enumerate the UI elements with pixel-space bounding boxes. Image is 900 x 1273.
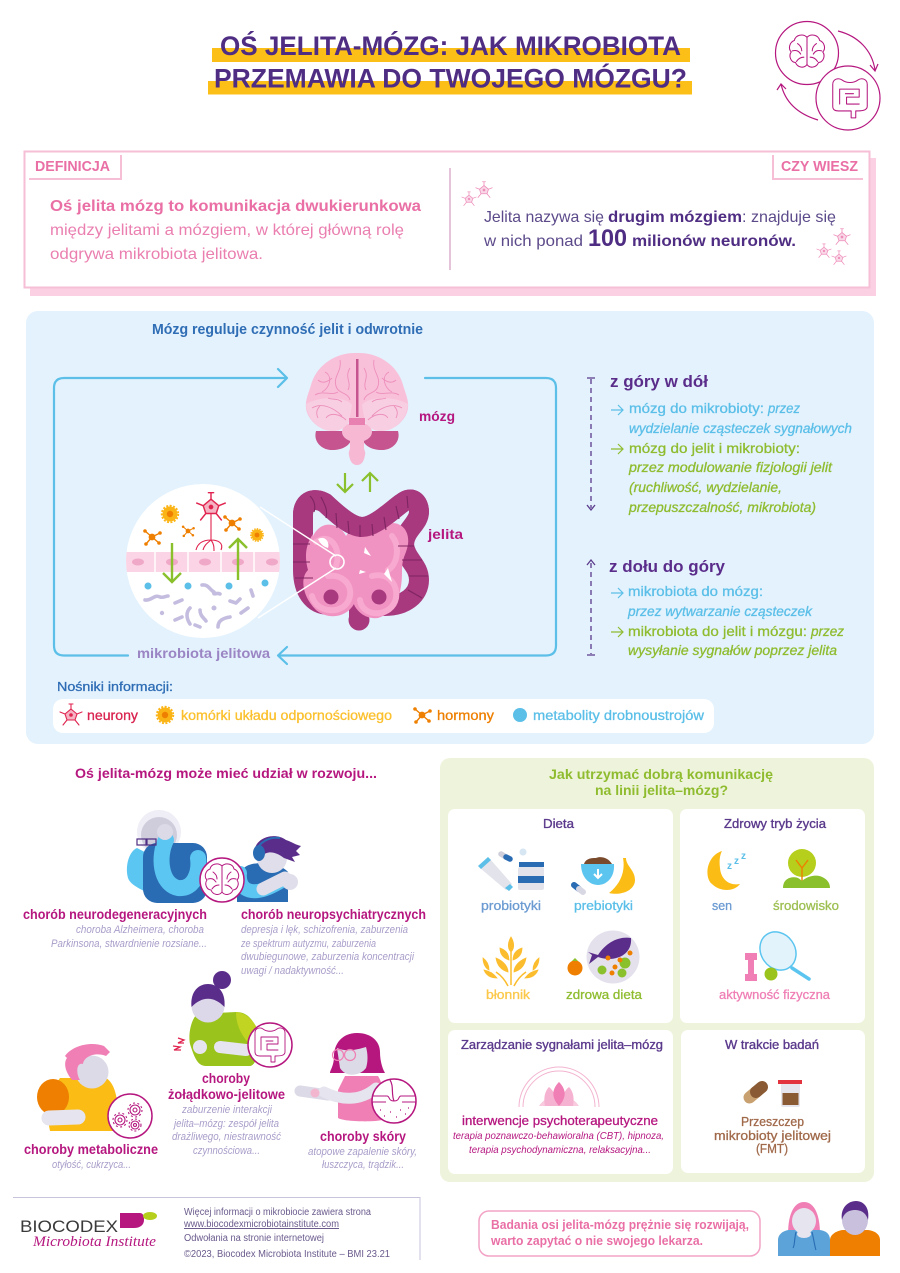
illustration: brain	[306, 353, 408, 465]
label: błonnik	[486, 987, 531, 1002]
top down explanation: (ruchliwość, wydzielanie,	[629, 479, 782, 495]
footer text: www.biocodexmicrobiotainstitute.com	[183, 1219, 339, 1230]
definition tab: DEFINICJA	[35, 159, 111, 175]
card: lifestyle: Zdrowy tryb życia	[724, 817, 826, 831]
did you know tab: CZY WIESZ	[781, 159, 858, 175]
text: skin: łuszczyca, trądzik...	[322, 1159, 404, 1171]
legend heading: Nośniki informacji:	[57, 679, 173, 694]
legend	[53, 699, 714, 733]
icon: gut badge	[248, 1023, 292, 1067]
bottom up explanation: mikrobiota do jelit i mózgu:	[628, 623, 807, 639]
definition tab	[29, 155, 121, 179]
text: neuropsychiatric: depresja i lęk, schizofrenia, zaburzenia	[241, 924, 408, 936]
icon: neuron sparkles	[462, 182, 850, 264]
bottom up explanation: z dołu do góry	[609, 558, 726, 576]
illustration: intestines	[293, 496, 428, 630]
legend item: metabolites: metabolity drobnoustrojów	[533, 708, 704, 723]
bottom up explanation: mikrobiota do mózg:	[628, 583, 763, 599]
text: metabolic	[24, 1142, 158, 1171]
icon: fibre	[483, 937, 539, 986]
did you know text	[483, 209, 836, 252]
panel: definition and did you know	[24, 152, 876, 296]
label: microbiota: mikrobiota jelitowa	[137, 645, 270, 661]
icon: lotus	[519, 1067, 599, 1107]
heading: na linii jelita–mózg?	[595, 782, 728, 798]
text: interventions: terapia psychodynamiczna, relaksacyjna...	[469, 1144, 651, 1156]
card: signal management: Zarządzanie sygnałami jelita–mózg	[461, 1038, 663, 1052]
card: in research: W trakcie badań	[725, 1038, 819, 1052]
icon: skin badge	[372, 1079, 416, 1123]
definition text: odgrywa mikrobiota jelitowa.	[50, 246, 263, 263]
icon: sport	[745, 925, 809, 981]
did you know text: w nich ponad	[483, 233, 583, 250]
footer text: ©2023, Biocodex Microbiota Institute – BMI 23.21	[184, 1249, 390, 1260]
arrow: feedback loop	[54, 369, 556, 664]
text: gastrointestinal: choroby	[202, 1071, 250, 1086]
text: FMT: (FMT)	[756, 1141, 788, 1156]
panel: gut brain axis	[26, 311, 874, 744]
label: środowisko	[773, 898, 839, 913]
illustration: magnified gut lining	[120, 484, 336, 638]
text: neuropsychiatric: uwagi / nadaktywność...	[241, 965, 344, 977]
footer text: Odwołania na stronie internetowej	[184, 1233, 324, 1244]
bottom up explanation: przez wytwarzanie cząsteczek	[627, 603, 813, 619]
arrows: brain to gut	[337, 473, 378, 492]
arrows: signals	[163, 539, 247, 582]
bottom up explanation: przez	[810, 623, 844, 639]
text: gastrointestinal: żołądkowo-jelitowe	[168, 1087, 285, 1102]
panel: diseases	[23, 765, 426, 1171]
callout: ask your doctor	[479, 1211, 760, 1256]
illustration: woman with stomach ache	[173, 971, 259, 1066]
card: lifestyle	[680, 809, 865, 1023]
did you know text: milionów neuronów.	[632, 233, 796, 250]
text: metabolic: choroby metaboliczne	[24, 1142, 158, 1157]
text: neurodegenerative	[23, 907, 207, 950]
heading: Mózg reguluje czynność jelit i odwrotnie	[152, 322, 423, 338]
heading	[549, 766, 773, 798]
top down explanation: mózg do mikrobioty:	[629, 400, 764, 416]
definition text: Oś jelita mózg to komunikacja dwukierunkowa	[50, 198, 421, 215]
footer text: Więcej informacji o mikrobiocie zawiera strona	[184, 1207, 372, 1218]
text: metabolic: otyłość, cukrzyca...	[52, 1159, 131, 1171]
logo: BIOCODEX	[20, 1217, 118, 1236]
illustration: doctors	[778, 1201, 880, 1256]
icon: capsule and container	[750, 1080, 802, 1107]
title: PRZEMAWIA DO TWOJEGO MÓZGU?	[214, 64, 687, 94]
definition text	[50, 198, 421, 263]
bottom up explanation: wysyłanie sygnałów poprzez jelita	[628, 642, 837, 658]
title	[208, 31, 692, 94]
icon: brain badge	[200, 858, 244, 902]
text: skin	[308, 1129, 417, 1171]
illustration: metabolic person	[37, 1044, 120, 1131]
text: gastrointestinal: drażliwego, niestrawność	[172, 1131, 281, 1143]
did you know text: 100	[588, 225, 627, 252]
legend item: hormones: hormony	[437, 708, 494, 723]
text: FMT	[714, 1114, 831, 1156]
card: diet	[448, 809, 673, 1023]
did you know tab	[773, 155, 863, 179]
top down explanation: przez	[767, 400, 800, 416]
text: interventions: terapia poznawczo-behawioralna (CBT), hipnoza,	[453, 1130, 664, 1142]
did you know text: Jelita nazywa się	[484, 209, 604, 226]
card: diet: Dieta	[543, 817, 574, 831]
definition text: między jelitami a mózgiem, w której główną rolę	[50, 222, 404, 239]
text: neurodegenerative: chorób neurodegeneracyjnych	[23, 907, 207, 922]
label: aktywność fizyczna	[719, 987, 831, 1002]
footer text	[183, 1207, 390, 1260]
did you know text: drugim mózgiem	[608, 209, 742, 226]
text: interventions: interwencje psychoterapeutyczne	[462, 1113, 658, 1128]
illustration: elderly person	[127, 810, 207, 903]
callout: ask your doctor: warto zapytać o nie swojego lekarza.	[490, 1234, 703, 1248]
label: gut: jelita	[427, 526, 463, 542]
logo: Microbiota Institute	[32, 1234, 156, 1250]
bottom up explanation	[587, 558, 844, 658]
callout: ask your doctor: Badania osi jelita-mózg prężnie się rozwijają,	[491, 1218, 749, 1232]
text: gastrointestinal: jelita–mózg: zespół jelita	[172, 1118, 279, 1130]
bacteria	[145, 585, 253, 627]
label: probiotyki	[481, 898, 541, 913]
heading: Oś jelita-mózg może mieć udział w rozwoju...	[75, 765, 377, 781]
icon: probiotics	[478, 848, 544, 891]
text: neurodegenerative: Parkinsona, stwardnienie rozsiane...	[51, 938, 207, 950]
title: OŚ JELITA-MÓZG: JAK MIKROBIOTA	[220, 31, 681, 61]
text: neuropsychiatric: chorób neuropsychiatrycznych	[241, 907, 426, 922]
text: neuropsychiatric	[240, 907, 426, 977]
panel: how to keep communication	[440, 758, 874, 1182]
legend item: neurons: neurony	[87, 708, 138, 723]
text: interventions	[453, 1113, 664, 1156]
text: gastrointestinal: zaburzenie interakcji	[181, 1104, 272, 1116]
icon: healthy diet	[568, 930, 640, 984]
card: signal management	[448, 1030, 673, 1174]
icon: gears badge	[108, 1094, 152, 1138]
heading: Jak utrzymać dobrą komunikację	[549, 766, 773, 782]
icon: moon: z	[741, 851, 746, 862]
label: prebiotyki	[574, 898, 633, 913]
text: neurodegenerative: choroba Alzheimera, choroba	[76, 924, 204, 936]
text: skin: choroby skóry	[320, 1129, 406, 1144]
label: sen	[712, 898, 732, 913]
icon: moon: z	[727, 861, 732, 872]
footer	[13, 1198, 420, 1260]
top down explanation: mózg do jelit i mikrobioty:	[629, 440, 800, 456]
text: skin: atopowe zapalenie skóry,	[308, 1146, 417, 1158]
text: FMT: Przeszczep	[741, 1114, 804, 1129]
label: zdrowa dieta	[566, 987, 643, 1002]
icon: neuron	[196, 493, 225, 551]
icon: moon	[707, 851, 746, 890]
legend item: immune cells: komórki układu odpornościowego	[181, 708, 392, 723]
illustration: young person	[237, 836, 301, 902]
top down explanation: z góry w dół	[610, 373, 708, 391]
legend item: hormones	[413, 707, 494, 724]
icon: brain and gut cycle	[776, 22, 880, 130]
illustration: person with skin condition	[300, 1033, 385, 1121]
icon: environment	[783, 849, 830, 888]
text: gastrointestinal	[168, 1071, 285, 1157]
top down explanation	[587, 373, 852, 515]
label: brain: mózg	[419, 408, 455, 424]
icon: prebiotics	[574, 857, 635, 894]
top down explanation: przepuszczalność, mikrobiota)	[628, 499, 816, 515]
top down explanation: przez modulowanie fizjologii jelit	[628, 459, 833, 475]
text: FMT: mikrobioty jelitowej	[714, 1128, 831, 1143]
logo	[20, 1212, 157, 1250]
text: gastrointestinal: czynnościowa...	[193, 1145, 260, 1157]
did you know text: : znajduje się	[742, 209, 836, 226]
icon: moon: z	[734, 856, 739, 867]
top down explanation: wydzielanie cząsteczek sygnałowych	[629, 420, 852, 436]
text: neuropsychiatric: dwubiegunowe, zaburzenia koncentracji	[241, 951, 414, 963]
card: in research	[681, 1030, 865, 1173]
legend item: neurons	[60, 704, 138, 725]
text: neuropsychiatric: ze spektrum autyzmu, zaburzenia	[240, 938, 376, 950]
